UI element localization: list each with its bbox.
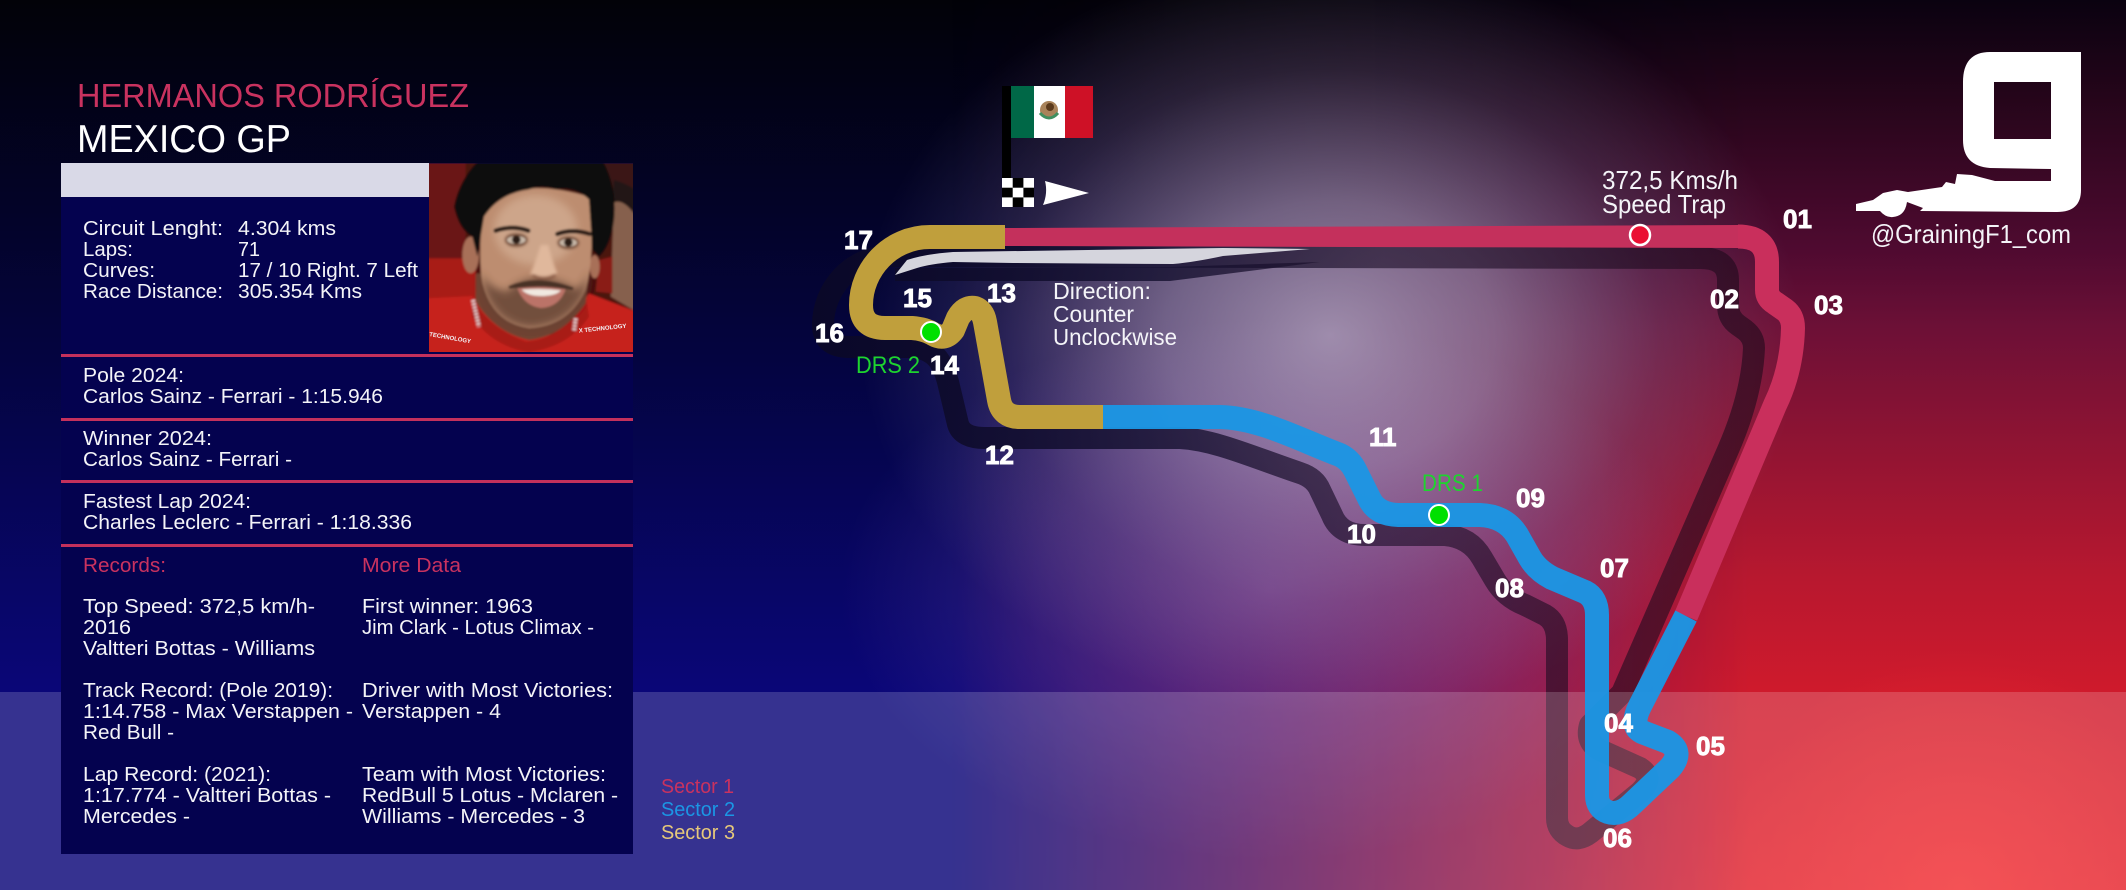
DRS 2 zone — [856, 322, 941, 379]
title — [77, 77, 469, 161]
turn numbers: 09 — [1516, 483, 1545, 513]
shirt lettering: TECHNOLOGY — [429, 332, 471, 345]
icon: mexican flag on pole — [1002, 86, 1093, 178]
eyes — [505, 233, 528, 247]
circuit stats: Laps: — [83, 239, 133, 261]
driver photo — [426, 160, 636, 355]
grand prix name: MEXICO GP — [77, 118, 291, 161]
records column: Lap Record: (2021): — [83, 764, 271, 786]
face — [480, 188, 592, 328]
logo handle: @GrainingF1_com — [1871, 219, 2071, 249]
records column: 2016 — [83, 617, 131, 639]
more data column: First winner: 1963 — [362, 596, 533, 618]
mouth — [517, 287, 566, 308]
speed trap marker: 372,5 Kms/h — [1602, 165, 1738, 195]
turn numbers: 04 — [1604, 708, 1633, 738]
logo: g with F1 car — [1856, 52, 2081, 249]
track shadow — [823, 256, 1754, 838]
winner 2024 — [83, 428, 292, 471]
neck — [476, 273, 589, 340]
turn numbers: 11 — [1369, 422, 1396, 452]
direction note: Unclockwise — [1053, 324, 1177, 350]
eyebrows — [496, 228, 590, 234]
sector legend: Sector 2 — [661, 799, 735, 821]
more data column: Team with Most Victories: — [362, 764, 606, 786]
mustache — [509, 281, 573, 289]
panel header bar — [61, 163, 429, 197]
pole 2024 — [83, 365, 383, 408]
speed trap marker: Speed Trap — [1602, 189, 1726, 219]
direction note: Direction: — [1053, 278, 1151, 304]
turn numbers: 16 — [815, 318, 844, 348]
turn numbers: 13 — [987, 278, 1016, 308]
pit lane — [895, 248, 1310, 275]
driver photo: X TECHNOLOGY — [579, 324, 627, 335]
more data column: RedBull 5 Lotus - Mclaren - — [362, 785, 618, 807]
circuit stats: 4.304 kms — [238, 218, 336, 240]
records column: Valtteri Bottas - Williams — [83, 638, 315, 660]
winner 2024: Carlos Sainz - Ferrari - — [83, 449, 292, 471]
turn numbers: 02 — [1710, 284, 1739, 314]
circuit stats: 71 — [238, 239, 260, 261]
more data column: Driver with Most Victories: — [362, 680, 613, 702]
turn numbers: 10 — [1347, 519, 1376, 549]
fastest lap 2024: Charles Leclerc - Ferrari - 1:18.336 — [83, 512, 412, 534]
records column — [83, 555, 353, 828]
turn numbers: 17 — [844, 225, 873, 255]
more data column: Jim Clark - Lotus Climax - — [362, 617, 594, 639]
records column: Top Speed: 372,5 km/h- — [83, 596, 315, 618]
sector 2: blue — [1103, 417, 1686, 813]
turn numbers: 06 — [1603, 823, 1632, 853]
records column: Records: — [83, 555, 166, 577]
turn numbers: 15 — [903, 283, 932, 313]
turn numbers: 01 — [1783, 204, 1812, 234]
more data column: More Data — [362, 555, 462, 577]
records column: Red Bull - — [83, 722, 174, 744]
DRS 2 zone: DRS 2 — [856, 352, 920, 379]
sector legend: Sector 3 — [661, 822, 735, 844]
shirt — [426, 293, 636, 355]
fastest lap 2024 — [83, 491, 412, 534]
winner 2024: Winner 2024: — [83, 428, 212, 450]
circuit stats — [83, 218, 418, 303]
hair — [454, 160, 615, 257]
circuit stats: Circuit Lenght: — [83, 218, 223, 240]
turn numbers: 08 — [1495, 573, 1524, 603]
bottom translucent band — [0, 692, 2126, 890]
more data column: Williams - Mercedes - 3 — [362, 806, 585, 828]
turn numbers: 05 — [1696, 731, 1725, 761]
circuit stats: 305.354 Kms — [238, 281, 362, 303]
more data column: Verstappen - 4 — [362, 701, 501, 723]
circuit name: HERMANOS RODRÍGUEZ — [77, 77, 469, 114]
turn numbers — [815, 204, 1843, 853]
records column: Track Record: (Pole 2019): — [83, 680, 333, 702]
divider rules — [61, 354, 633, 547]
nose — [530, 245, 557, 277]
circuit stats: Curves: — [83, 260, 155, 282]
panel background — [61, 163, 633, 854]
sector 1: pink — [1005, 225, 1793, 616]
pole 2024: Carlos Sainz - Ferrari - 1:15.946 — [83, 386, 383, 408]
sector 3: gold — [861, 237, 1103, 417]
icon: chequered start flag — [1002, 178, 1034, 207]
DRS 1 zone — [1422, 470, 1483, 525]
turn numbers: 12 — [985, 440, 1014, 470]
circuit stats: Race Distance: — [83, 281, 223, 303]
turn numbers: 14 — [930, 350, 959, 380]
turn numbers: 03 — [1814, 290, 1843, 320]
sector legend — [661, 776, 735, 844]
records column: 1:14.758 - Max Verstappen - — [83, 701, 353, 723]
records column: 1:17.774 - Valtteri Bottas - — [83, 785, 331, 807]
arrow: race direction — [1043, 181, 1089, 205]
direction note: Counter — [1053, 301, 1134, 327]
direction note — [1053, 278, 1177, 350]
DRS 1 zone: DRS 1 — [1422, 470, 1483, 497]
track — [861, 225, 1793, 813]
speed trap marker — [1602, 165, 1738, 245]
turn numbers: 07 — [1600, 553, 1629, 583]
fastest lap 2024: Fastest Lap 2024: — [83, 491, 251, 513]
records column: Mercedes - — [83, 806, 190, 828]
beard — [481, 268, 589, 328]
more data column — [362, 555, 618, 828]
circuit stats: 17 / 10 Right. 7 Left — [238, 260, 418, 282]
pole 2024: Pole 2024: — [83, 365, 184, 387]
sector legend: Sector 1 — [661, 776, 734, 798]
